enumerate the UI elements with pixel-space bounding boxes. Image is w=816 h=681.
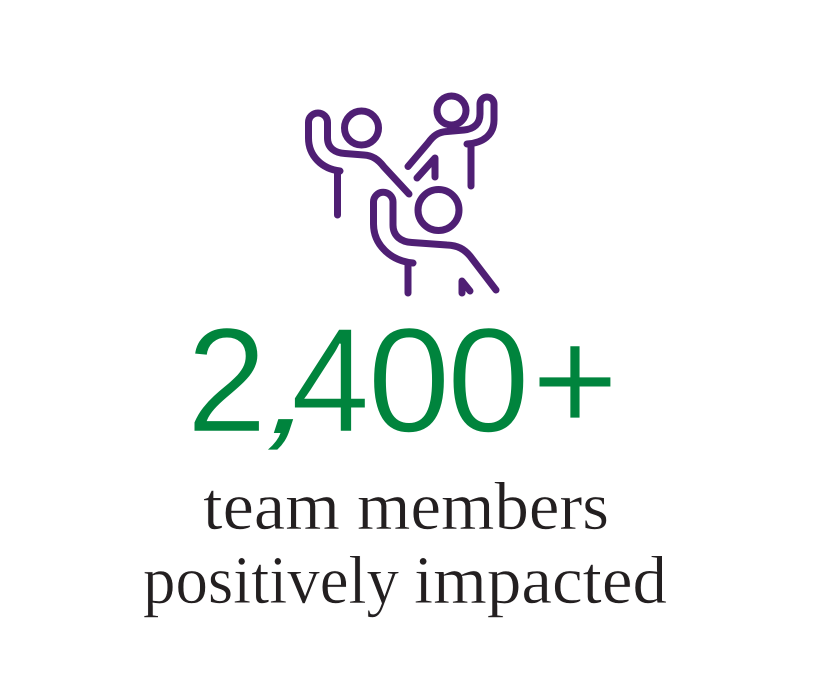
statistic: 2,400+: 4 [291,296,370,463]
caption line 1: members [357,468,609,544]
icon: right person [408,96,494,186]
statistic: 2,400+: 0 [368,296,450,464]
statistic: 2,400+: + [531,296,619,464]
caption: team members positively impacted [143,468,667,618]
icon: front person [374,190,496,293]
caption line 2: impacted [414,542,667,618]
caption line 2: positively [143,542,399,618]
statistic: 2,400+: 0 [447,296,530,464]
statistic: 2,400+ [187,296,619,464]
statistic: 2,400+: , [250,316,341,461]
statistic: 2,400+: 2 [187,298,267,464]
icon: left person [308,111,409,215]
icon: three people with raised hands [308,96,496,293]
caption line 1: team [203,468,340,544]
